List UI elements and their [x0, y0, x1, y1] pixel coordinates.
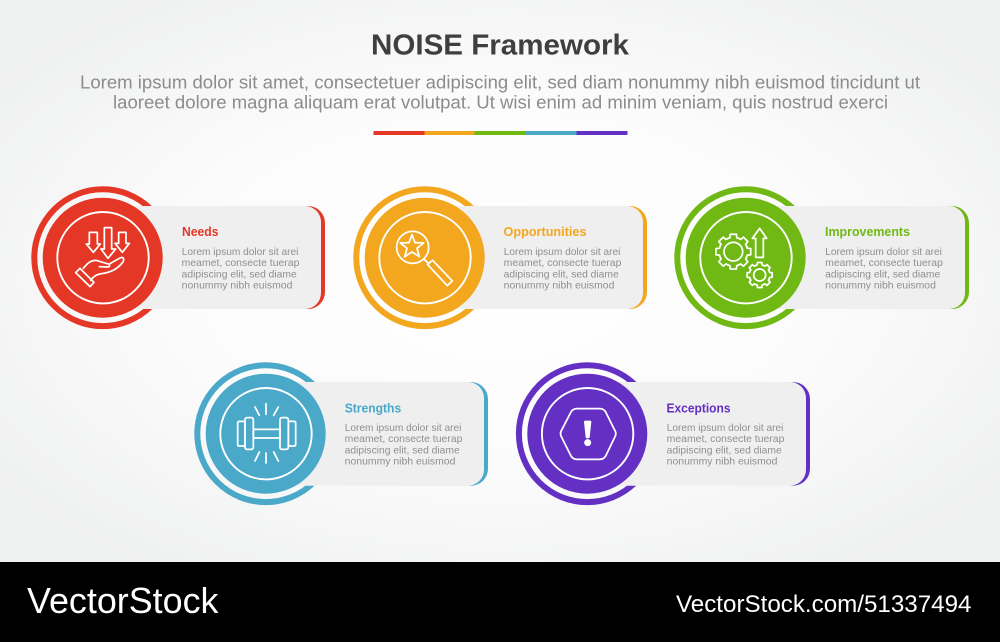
body text: Strengths: meamet, consecte tuerap [345, 434, 463, 445]
body text: Exceptions [667, 423, 785, 468]
body text: Exceptions: Lorem ipsum dolor sit arei [667, 423, 783, 434]
body text: Opportunities: meamet, consecte tuerap [504, 258, 622, 269]
body text: Strengths: nonummy nibh euismod [345, 457, 456, 468]
heading: Exceptions: Exceptions [666, 402, 731, 416]
footer url text: VectorStock.com/51337494 [676, 591, 972, 618]
panel: Needs [34, 189, 325, 326]
icon: hexagon warning [560, 409, 616, 459]
body text: Improvements: nonummy nibh euismod [825, 281, 936, 292]
body text: Opportunities [504, 247, 622, 292]
subtitle text [80, 72, 920, 112]
body text: Exceptions: adipiscing elit, sed diame [667, 445, 782, 456]
body text: Needs: meamet, consecte tuerap [182, 258, 300, 269]
body text: Strengths: adipiscing elit, sed diame [345, 445, 460, 456]
body text: Exceptions: meamet, consecte tuerap [667, 434, 785, 445]
panel: Opportunities [356, 189, 647, 326]
heading: Needs: Needs [182, 225, 219, 239]
body text: Exceptions: nonummy nibh euismod [667, 457, 778, 468]
footer logo text: VectorStock [27, 580, 219, 621]
body text: Opportunities: Lorem ipsum dolor sit arei [504, 247, 620, 258]
icon: gears with up arrow [716, 228, 772, 288]
body text: Improvements [825, 247, 943, 292]
panel: Improvements [677, 189, 969, 326]
icon: dumbbell [238, 404, 296, 463]
heading: Improvements: Improvements [825, 225, 910, 239]
panel: Strengths [197, 365, 488, 502]
heading: Opportunities: Opportunities [504, 225, 587, 239]
colour divider bar [374, 131, 628, 135]
icon: magnifier with star [397, 231, 452, 286]
body text: Needs [182, 247, 300, 292]
body text: Strengths: Lorem ipsum dolor sit arei [345, 423, 461, 434]
body text: Improvements: adipiscing elit, sed diame [825, 269, 941, 280]
panel: Exceptions [519, 365, 810, 502]
body text: Needs: nonummy nibh euismod [182, 281, 293, 292]
subtitle text: Lorem ipsum dolor sit amet, consectetuer adipiscing elit, sed diam nonummy nibh euismod tincidunt ut [80, 72, 920, 92]
footer band [0, 562, 1000, 642]
title: NOISE Framework [371, 30, 630, 62]
body text: Strengths [345, 423, 463, 468]
body text: Needs: Lorem ipsum dolor sit arei [182, 247, 298, 258]
heading: Strengths: Strengths [345, 402, 401, 416]
body text: Improvements: meamet, consecte tuerap [825, 258, 943, 269]
body text: Opportunities: nonummy nibh euismod [504, 281, 615, 292]
subtitle text: laoreet dolore magna aliquam erat volutpat. Ut wisi enim ad minim veniam, quis nostrud exerci [113, 92, 888, 112]
body text: Improvements: Lorem ipsum dolor sit arei [825, 247, 942, 258]
body text: Opportunities: adipiscing elit, sed diame [504, 269, 619, 280]
icon: hand with down arrows [76, 228, 129, 287]
body text: Needs: adipiscing elit, sed diame [182, 269, 297, 280]
